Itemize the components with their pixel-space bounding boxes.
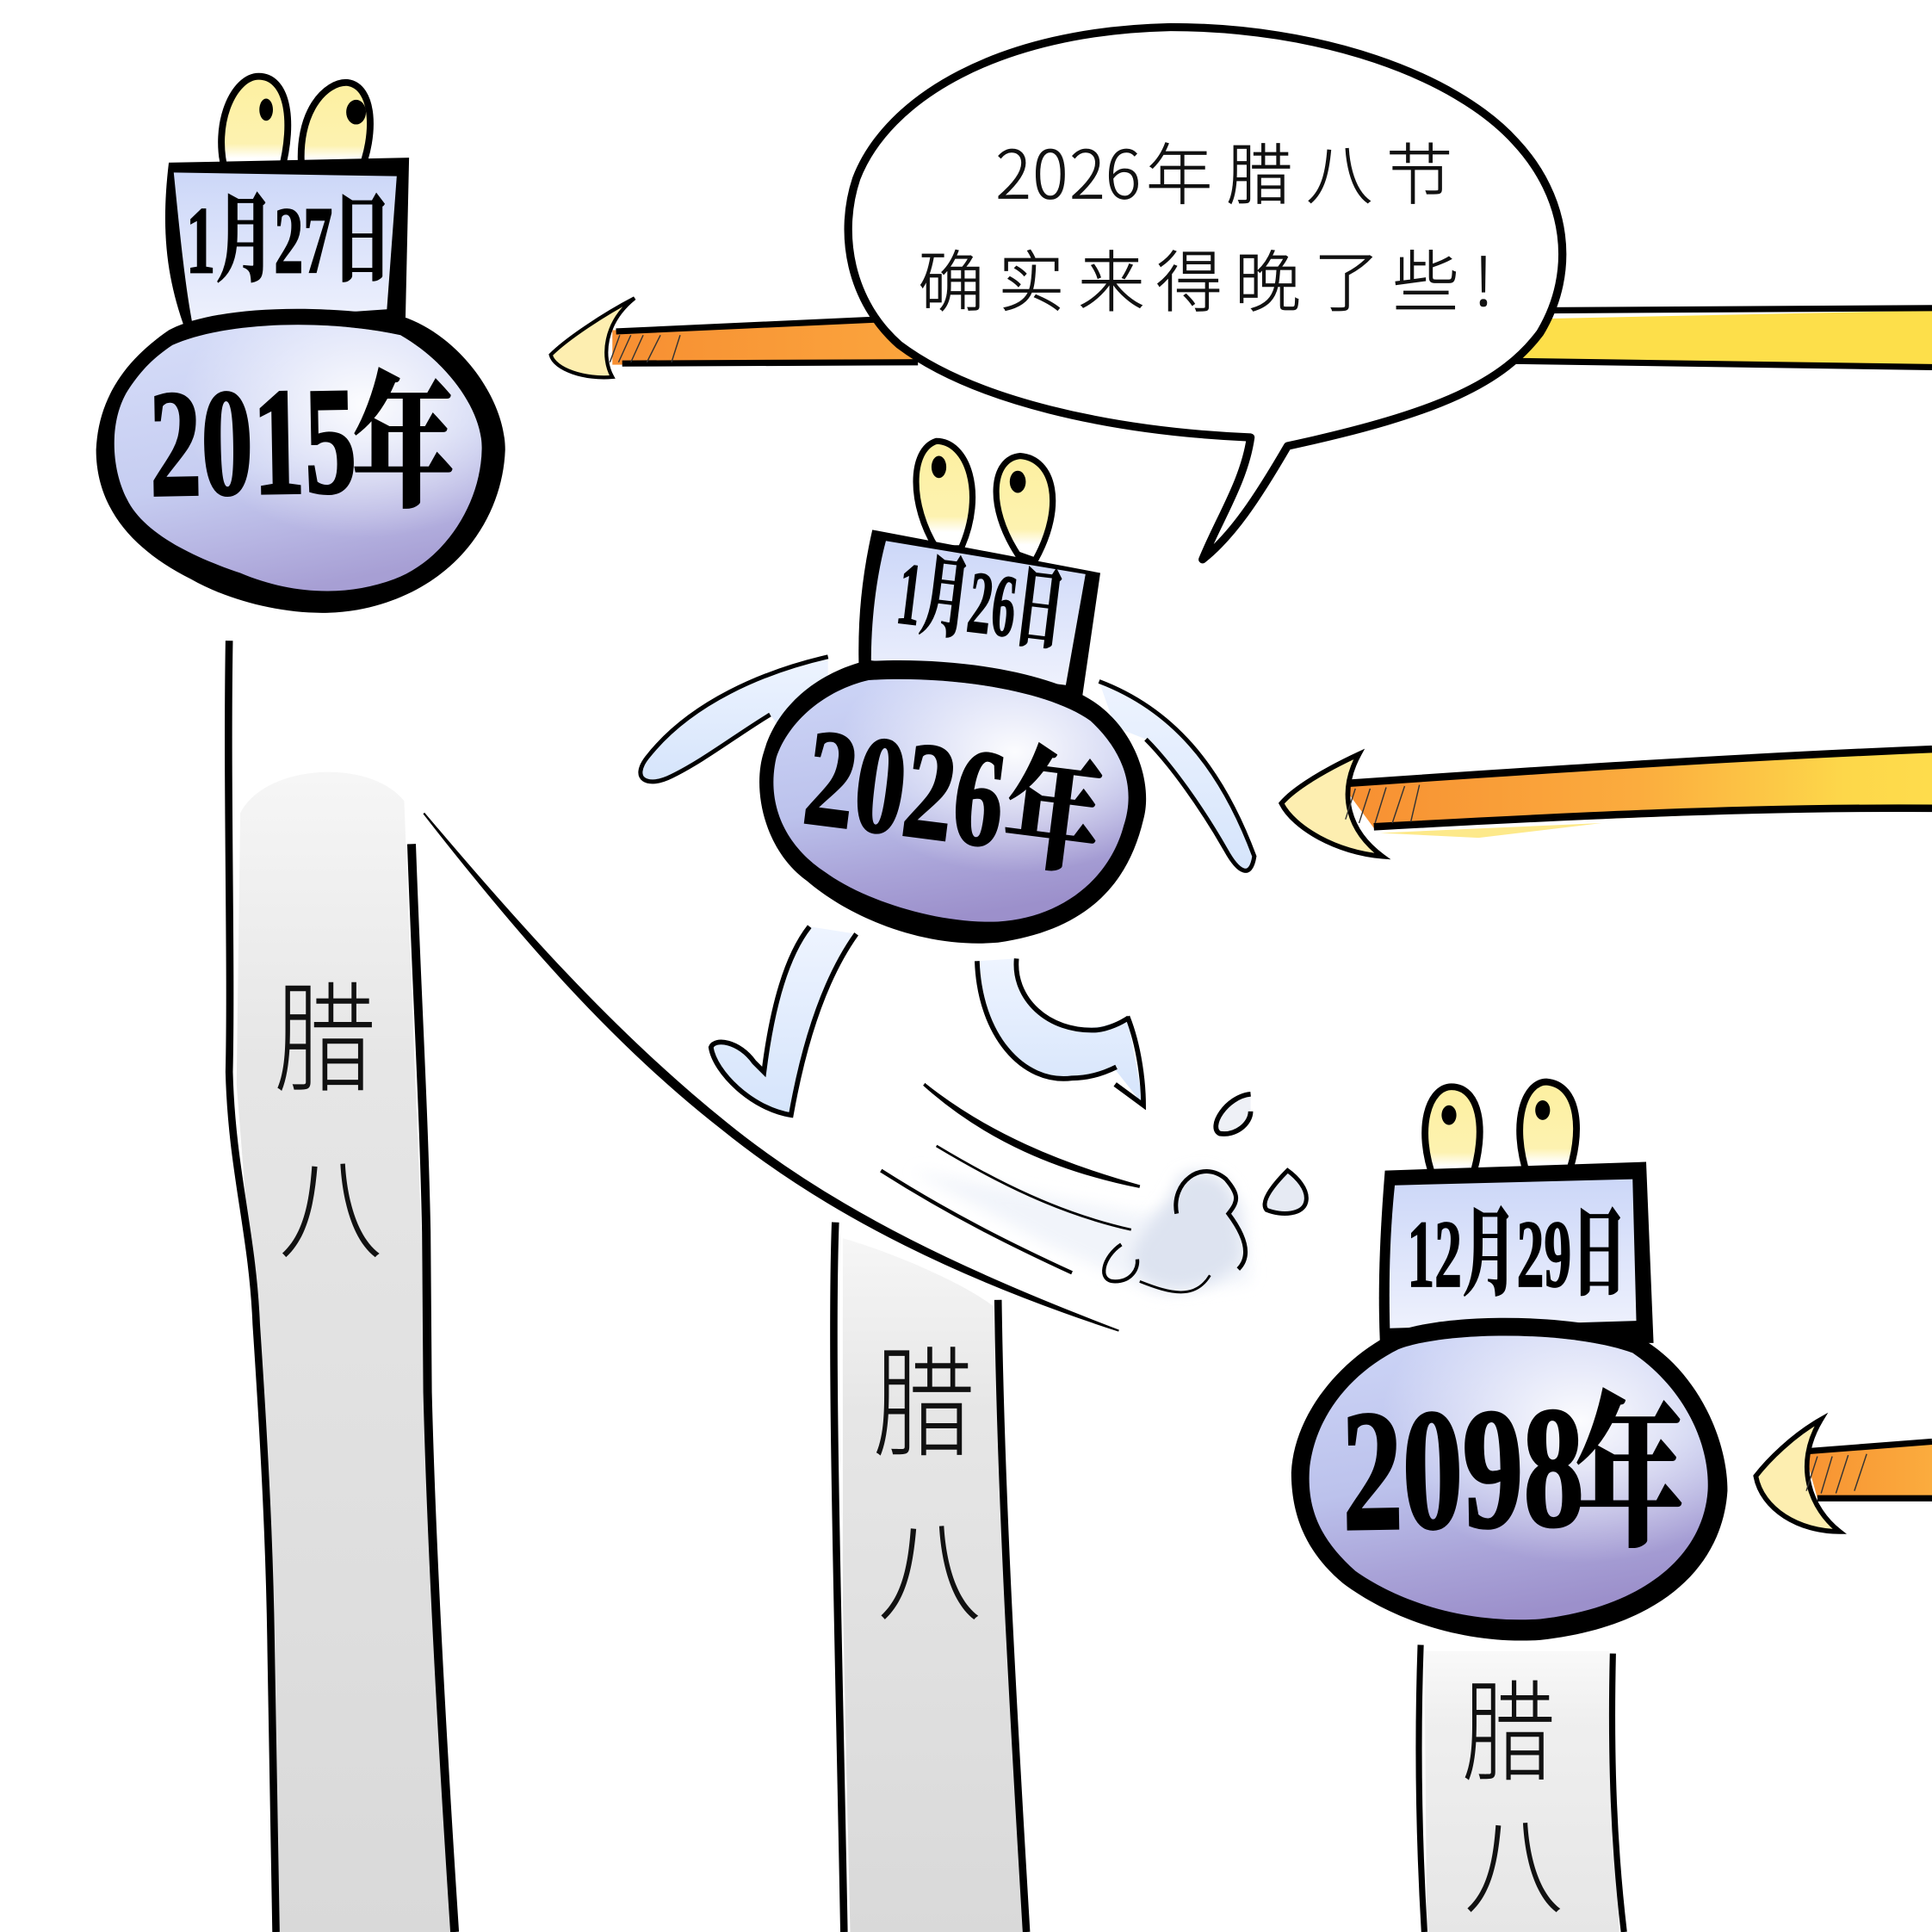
motion: long slide curve [424,814,1118,1331]
ball: 2098年: 年 [1575,1385,1684,1568]
tag: 12月29日: 12月29日 [1407,1201,1626,1308]
arm: left [641,657,828,782]
ball: 2026年: 年 [997,738,1109,892]
icon: right eye [996,456,1053,560]
leg: right [977,958,1143,1105]
arrow: bottom arrow [1756,1420,1932,1532]
text: bubble line 1: 2026年腊八节 [995,121,1452,218]
icon: right eye [301,83,370,172]
speech bubble [848,27,1563,560]
column: 腊八 2098 [1419,1644,1624,1932]
arrow: middle arrow [1281,746,1932,857]
tag: 1月27日: 1月27日 [186,187,391,293]
column: 腊八 2026 [833,1223,1026,1932]
ball: 2098年: 2098 [1341,1372,1585,1567]
arrow: top arrow [551,298,1932,377]
ball: 2015年: 2015 [148,356,357,529]
tag: 12月29日 [1379,1162,1654,1343]
column: 腊八 2015 [228,641,455,1932]
arm: left outline [641,657,828,782]
icon: right eye [1520,1082,1576,1177]
ball: 2098年 [1291,1318,1727,1641]
text: 腊: 腊 [274,943,376,1117]
arm: right [1099,681,1254,872]
character: 2015 [96,77,505,613]
tag: 1月27日 [165,158,409,335]
icon: left eye [916,441,973,548]
icon: left eye [1425,1087,1480,1180]
ball: 2026年: 2026 [797,702,1013,877]
text: 八: 八 [1464,1780,1564,1932]
character: 2098 [1291,1082,1727,1641]
text: 八: 八 [278,1118,383,1283]
tag: 1月26日: 1月26日 [892,543,1069,662]
motion: dust cloud and speed lines [881,1084,1306,1294]
arm: right outline [1099,681,1254,870]
text: 腊: 腊 [1461,1644,1556,1805]
ball: 2015年: 年 [352,364,455,526]
leg: left [711,926,857,1118]
text: 八: 八 [877,1481,981,1644]
ball: 2015年 [96,309,505,613]
ball: 2026年 [759,660,1146,944]
tag: 1月26日 [858,529,1100,700]
icon: left eye [221,77,288,172]
text: bubble line 2: 确实来得晚了些! [918,229,1493,325]
character: 2026 [641,441,1254,1118]
text: 腊: 腊 [872,1308,975,1482]
